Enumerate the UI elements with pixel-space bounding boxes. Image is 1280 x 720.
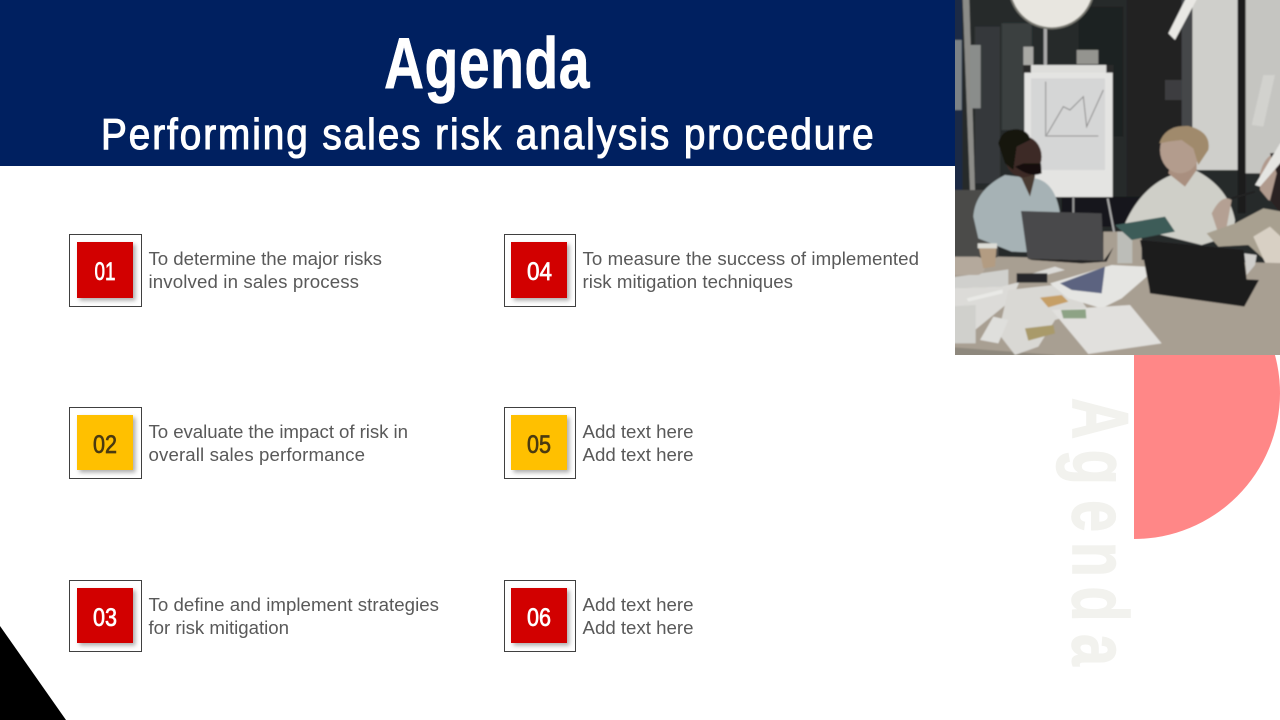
number box 06: 06: [527, 604, 551, 632]
text 01: [148, 248, 382, 292]
number box 05: [504, 408, 576, 478]
photo: team meeting around a table: [945, 0, 1280, 367]
text 04: To measure the success of implemented: [582, 248, 919, 269]
number box 01: 01: [94, 258, 116, 286]
text 06: Add text here: [582, 617, 693, 638]
header banner: [0, 0, 955, 166]
text 06: [582, 594, 693, 638]
number box 04: [504, 234, 576, 306]
text 05: Add text here: [582, 444, 693, 465]
text 04: risk mitigation techniques: [582, 271, 793, 292]
text 03: To define and implement strategies: [148, 594, 439, 615]
number box 03: [70, 580, 142, 652]
agenda item 03: [70, 580, 439, 652]
text 02: To evaluate the impact of risk in: [148, 421, 408, 442]
subtitle: Performing sales risk analysis procedure: [101, 109, 874, 159]
text 01: To determine the major risks: [148, 248, 382, 269]
text 02: [148, 421, 408, 465]
text 05: Add text here: [582, 421, 693, 442]
number box 02: 02: [93, 431, 117, 459]
title: Agenda: [384, 23, 591, 104]
number box 05: 05: [527, 431, 551, 459]
decorative pink semicircle: [1134, 355, 1280, 539]
text 02: overall sales performance: [148, 444, 365, 465]
text 03: for risk mitigation: [148, 617, 289, 638]
text 03: [148, 594, 439, 638]
agenda item 04: [504, 234, 919, 306]
number box 06: [504, 580, 576, 652]
agenda item 01: [70, 234, 382, 306]
agenda item 06: [504, 580, 693, 652]
number box 02: [70, 408, 142, 478]
text 04: [582, 248, 919, 292]
text 05: [582, 421, 693, 465]
agenda item 02: [70, 408, 408, 478]
agenda item 05: [504, 408, 693, 478]
text 01: involved in sales process: [148, 271, 359, 292]
number box 04: 04: [527, 258, 552, 286]
vertical watermark: Agenda: Agenda: [1056, 398, 1144, 666]
black corner triangle: [0, 626, 66, 720]
number box 03: 03: [93, 604, 117, 632]
text 06: Add text here: [582, 594, 693, 615]
number box 01: [70, 234, 142, 306]
